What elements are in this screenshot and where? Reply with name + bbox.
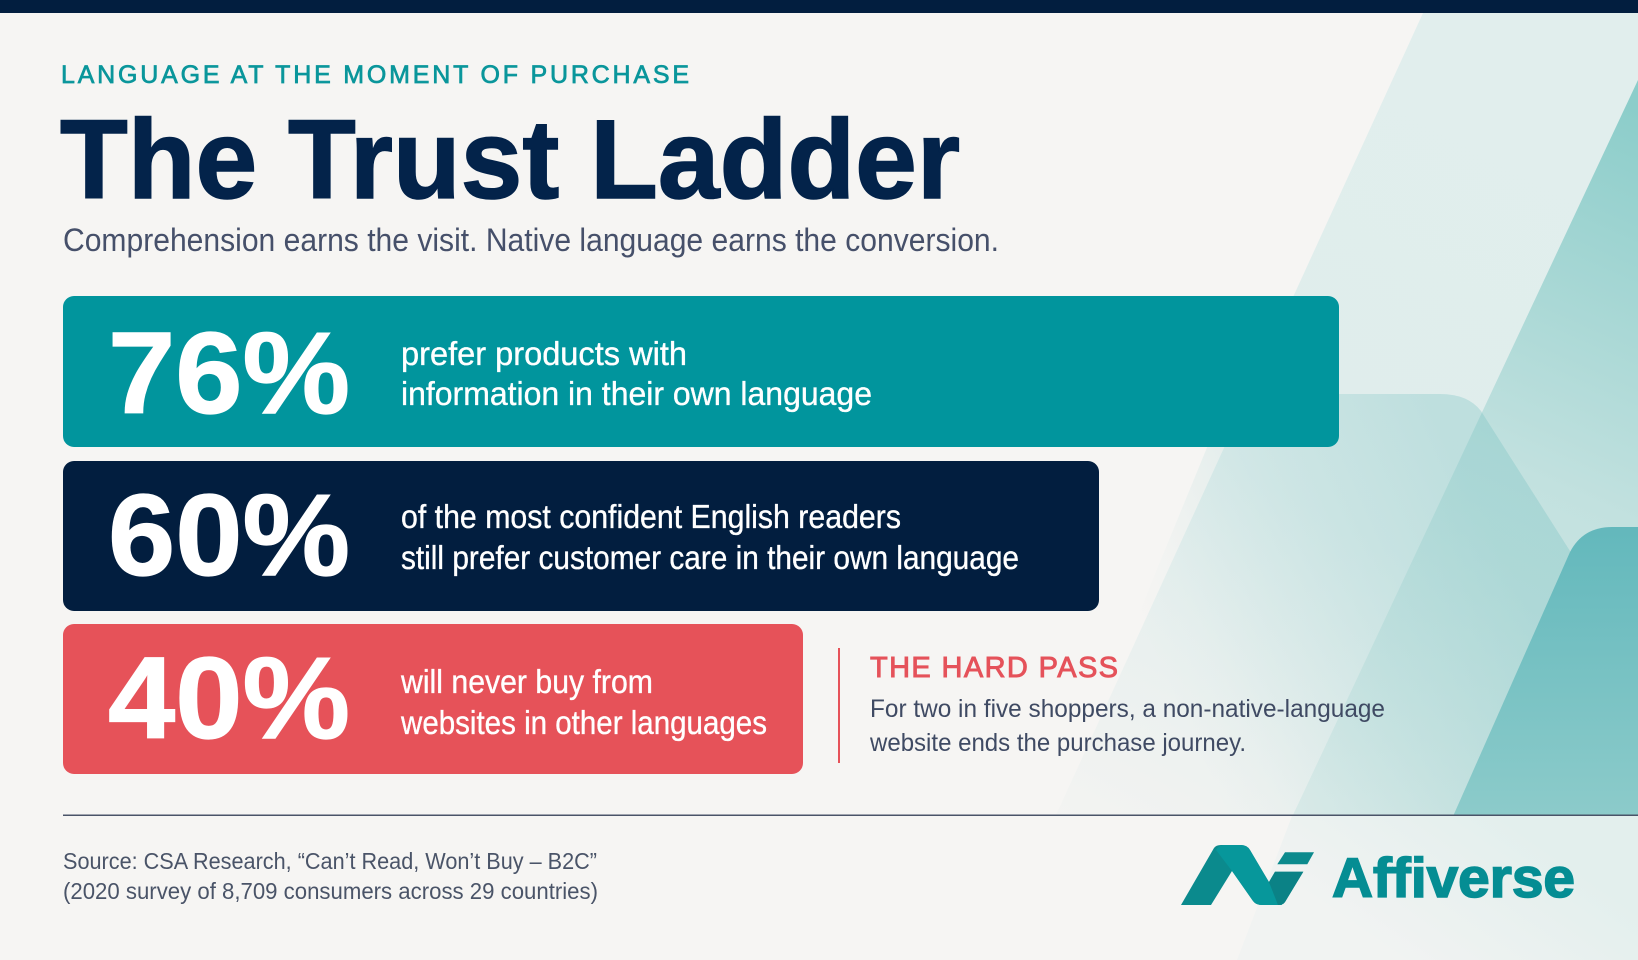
text: 76% description xyxy=(401,335,872,412)
text: 76% description: information in their own language xyxy=(401,375,872,412)
text: 76% description: prefer products with xyxy=(401,335,687,372)
callout body: website ends the purchase journey. xyxy=(869,729,1246,757)
text: 40% description xyxy=(400,663,767,741)
text: 40% description: will never buy from xyxy=(400,663,653,700)
callout heading: THE HARD PASS xyxy=(870,652,1118,684)
title: The Trust Ladder xyxy=(60,97,960,222)
bar: 60% xyxy=(63,461,1099,611)
subtitle: Comprehension earns the visit. Native language earns the conversion. xyxy=(63,222,999,258)
bar: 76% xyxy=(63,296,1339,447)
source note xyxy=(63,848,598,904)
callout body: For two in five shoppers, a non-native-language xyxy=(870,695,1385,723)
callout body xyxy=(869,695,1385,757)
top bar xyxy=(0,0,1638,13)
stat: 76%: 76% xyxy=(108,308,350,438)
stat: 40%: 40% xyxy=(108,633,350,763)
callout: the hard pass xyxy=(838,648,1385,763)
text: 40% description: websites in other languages xyxy=(400,704,767,741)
text: 60% description xyxy=(401,498,1019,576)
background art: layered teal shapes xyxy=(1056,13,1638,960)
icon: Affiverse logo mark xyxy=(1181,845,1314,905)
source note: Source: CSA Research, “Can’t Read, Won’t Buy – B2C” xyxy=(63,848,597,874)
text: 60% description: of the most confident English readers xyxy=(401,498,901,535)
text: 60% description: still prefer customer care in their own language xyxy=(401,539,1019,576)
source note: (2020 survey of 8,709 consumers across 29 countries) xyxy=(63,878,598,904)
stat: 60%: 60% xyxy=(108,470,350,600)
bar: 40% xyxy=(63,624,803,774)
brand name: Affiverse xyxy=(1332,846,1575,909)
eyebrow: LANGUAGE AT THE MOMENT OF PURCHASE xyxy=(61,61,689,89)
